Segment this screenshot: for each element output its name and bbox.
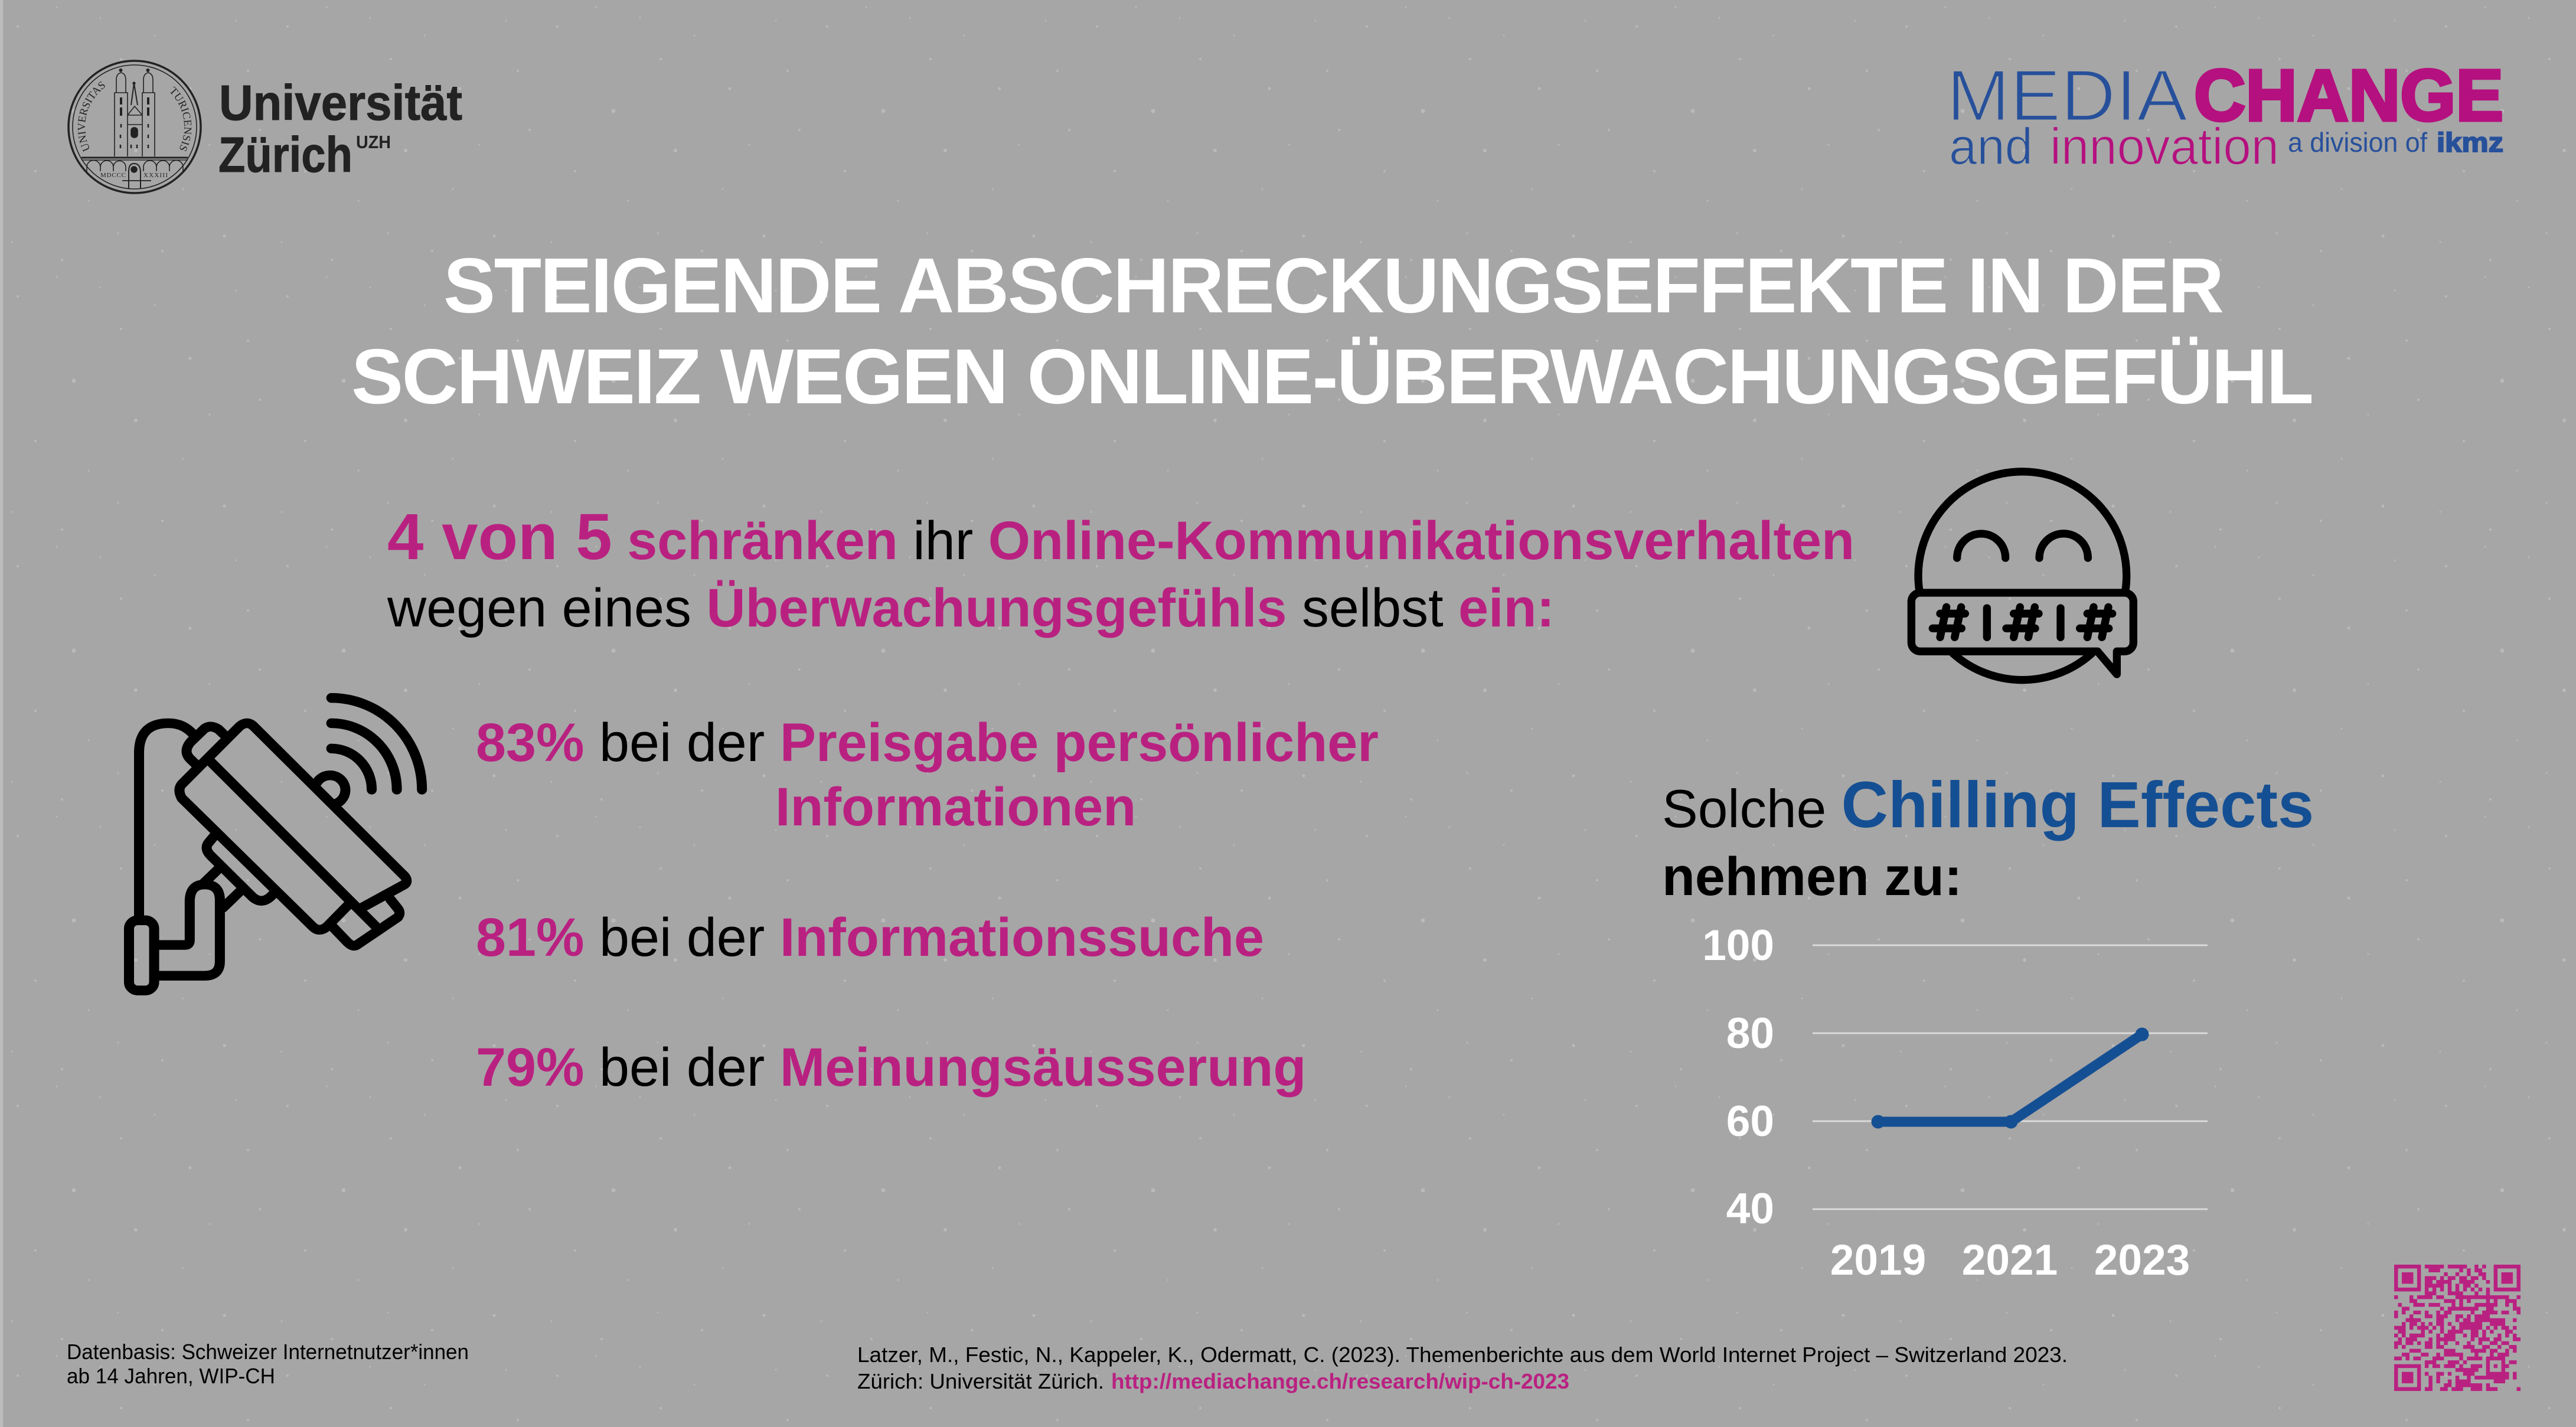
y axis labels: 60	[1726, 1098, 1774, 1145]
item: 83%: 83% bei der Preisgabe persönlicher	[476, 713, 1379, 773]
title	[351, 242, 2314, 420]
icon: university seal: XXXIII	[143, 172, 168, 179]
line chart: chilling effects 2019 to 2023	[1702, 922, 2208, 1284]
headline statement	[387, 501, 1855, 638]
chilling effects heading	[1662, 769, 2314, 907]
icon: university seal: UNIVERSITAS	[78, 81, 105, 152]
item: 83%	[476, 713, 1379, 837]
item: 83%: Informationen	[775, 777, 1136, 837]
item: 81%: 81% bei der Informationssuche	[476, 907, 1264, 968]
title: SCHWEIZ WEGEN ONLINE-ÜBERWACHUNGSGEFÜHL	[351, 333, 2314, 420]
data source note	[67, 1340, 469, 1388]
logo: Universität Zürich	[67, 60, 462, 194]
data source note: Datenbasis: Schweizer Internetnutzer*innen	[67, 1340, 469, 1364]
logo text: innovation: innovation	[2050, 118, 2279, 175]
x axis labels	[1830, 1236, 2190, 1284]
icon: university seal: TURICENSIS	[170, 86, 191, 151]
data line	[1872, 1027, 2149, 1129]
y axis labels: 80	[1726, 1010, 1774, 1057]
citation: Zürich: Universität Zürich.	[857, 1369, 1104, 1393]
wordmark: Zürich: Zürich	[218, 127, 352, 182]
icon: university seal: MDCCC	[100, 172, 126, 179]
data source note: ab 14 Jahren, WIP-CH	[67, 1364, 275, 1388]
chilling effects heading: Solche Chilling Effects	[1662, 769, 2314, 841]
y axis labels: 40	[1726, 1185, 1774, 1233]
x axis labels: 2021	[1962, 1236, 2058, 1284]
logo text: a division of: a division of	[2288, 127, 2427, 158]
logo text: ikmz: ikmz	[2437, 127, 2503, 158]
item: 79%: 79% bei der Meinungsäusserung	[476, 1037, 1306, 1098]
x axis labels: 2023	[2094, 1236, 2190, 1284]
icon: surveillance camera with wifi waves	[129, 698, 422, 991]
title: STEIGENDE ABSCHRECKUNGSEFFEKTE IN DER	[443, 242, 2224, 329]
headline statement: wegen eines Überwachungsgefühls selbst ein:	[387, 578, 1555, 638]
logo text: CHANGE: CHANGE	[2194, 55, 2503, 136]
citation: Latzer, M., Festic, N., Kappeler, K., Odermatt, C. (2023). Themenberichte aus dem World Internet Project – Switzerland 2023.	[857, 1343, 2068, 1367]
wordmark: UZH: UZH	[356, 132, 391, 152]
logo: Media Change and Innovation	[1947, 55, 2503, 175]
wordmark: Universität: Universität	[219, 75, 462, 130]
logo text: and: and	[1949, 118, 2033, 175]
chilling effects heading: nehmen zu:	[1662, 847, 1962, 907]
citation	[857, 1343, 2068, 1393]
logo text: MEDIA: MEDIA	[1947, 55, 2188, 136]
icon: gagged face with hashtag speech bubble	[1911, 472, 2133, 680]
icon: university seal	[67, 60, 202, 194]
list of self-restriction percentages	[476, 713, 1379, 1098]
headline statement: 4 von 5 schränken ihr Online-Kommunikationsverhalten	[387, 501, 1855, 573]
citation: http://mediachange.ch/research/wip-ch-2023	[1111, 1369, 1569, 1393]
QR code	[2394, 1266, 2521, 1389]
y axis labels	[1702, 922, 1774, 1233]
x axis labels: 2019	[1830, 1236, 1926, 1284]
y axis labels: 100	[1702, 922, 1774, 969]
